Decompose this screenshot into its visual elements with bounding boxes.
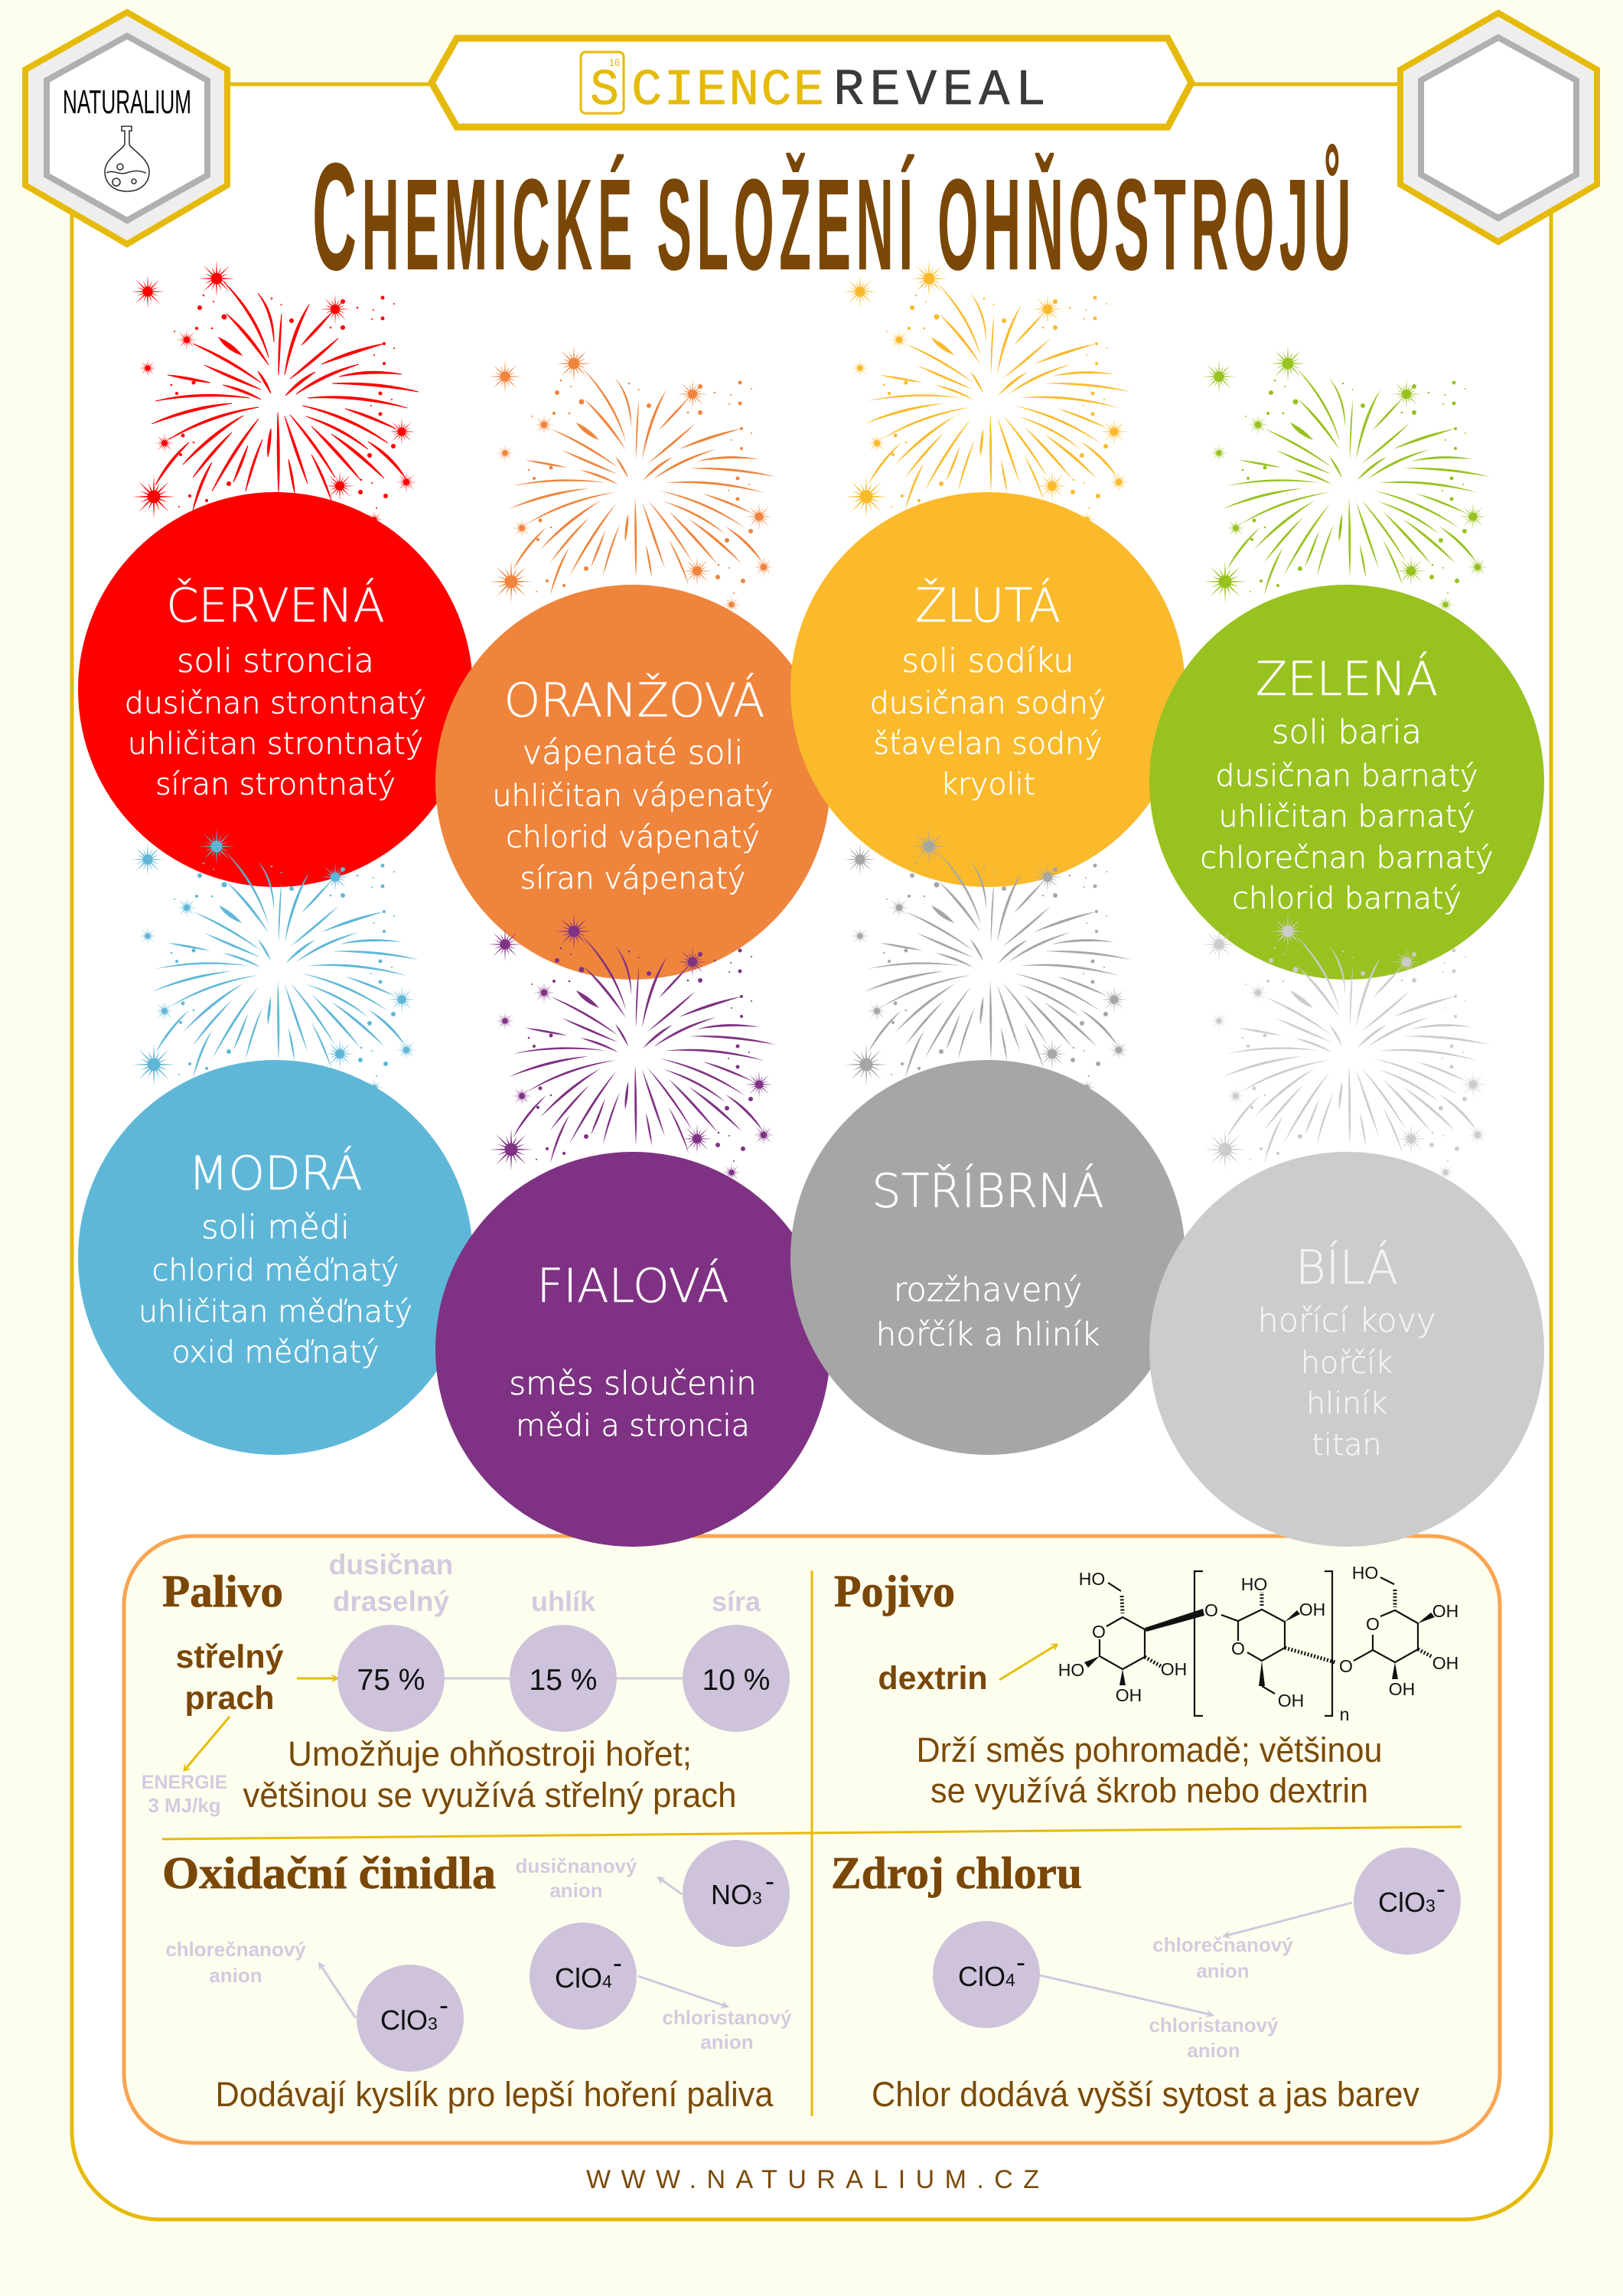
arrow: prach to energie	[184, 1717, 230, 1770]
circle: bílá: hořčík	[1301, 1345, 1393, 1381]
circle: modrá: oxid měďnatý	[172, 1335, 379, 1370]
bottom info panel	[124, 1536, 1500, 2143]
circle: žlutá: kryolit	[940, 767, 1035, 802]
circle: oranžová	[435, 585, 830, 980]
label: chlorečnanový anion: chlorečnanový	[165, 1938, 306, 1961]
label: chlorečnanový anion	[165, 1938, 306, 1987]
circle: oranžová: síran vápenatý	[520, 861, 745, 896]
circle: zelená: uhličitan barnatý	[1219, 799, 1475, 834]
ion: NO3: -	[765, 1865, 774, 1896]
section: Zdroj chloru	[831, 1848, 1461, 2114]
heading: Palivo: Palivo	[162, 1566, 283, 1616]
empty hexagon, top right	[1400, 13, 1597, 242]
component chain: 75 15 10 percent: uhlík	[531, 1586, 596, 1617]
circle: oranžová: chlorid vápenatý	[506, 820, 760, 855]
circle: červená	[78, 492, 473, 887]
circle: fialová: mědi a stroncia	[516, 1408, 750, 1443]
label: chlorečnanový anion	[1152, 1933, 1293, 1982]
label: dusičnanový anion: dusičnanový	[516, 1854, 637, 1877]
circle: žlutá: ŽLUTÁ	[915, 578, 1061, 633]
circle: bílá	[1149, 1152, 1544, 1547]
arrows: chlorine anion labels	[1040, 1903, 1352, 2015]
circle: zelená: chlorid barnatý	[1232, 881, 1462, 916]
circle: zelená: soli baria	[1272, 713, 1422, 752]
ion: ClO3	[357, 1965, 464, 2072]
circle: modrá	[78, 1060, 473, 1455]
circle: bílá: hliník	[1306, 1386, 1387, 1421]
label: chloristanový anion: chloristanový	[1149, 2014, 1279, 2037]
label: střelný prach	[175, 1639, 284, 1717]
chart: dextrin molecule: OH	[1432, 1601, 1458, 1621]
circle: stříbrná	[790, 1060, 1185, 1455]
component chain: 75 15 10 percent	[329, 1549, 790, 1732]
chart: dextrin molecule: OH	[1161, 1659, 1187, 1679]
circle: modrá: soli mědi	[201, 1208, 350, 1247]
description: Pojivo	[917, 1730, 1382, 1810]
circle: fialová: FIALOVÁ	[536, 1258, 729, 1313]
description: Pojivo: Drží směs pohromadě; většinou	[917, 1730, 1382, 1769]
label: energie	[142, 1772, 227, 1817]
component chain: 75 15 10 percent: 75 %	[357, 1664, 425, 1697]
circle: modrá: MODRÁ	[188, 1146, 363, 1201]
description: Oxidační činidla: Dodávají kyslík pro lepší hoření paliva	[216, 2075, 774, 2114]
chart: dextrin molecule: O	[1366, 1614, 1380, 1634]
circle: stříbrná: hořčík a hliník	[876, 1316, 1100, 1353]
label: chloristanový anion: anion	[1187, 2039, 1240, 2062]
description: Zdroj chloru: Chlor dodává vyšší sytost a jas barev	[872, 2075, 1419, 2114]
circle: stříbrná: STŘÍBRNÁ	[872, 1163, 1104, 1218]
description: Palivo: Umožňuje ohňostroji hořet;	[288, 1734, 692, 1773]
arrows: anion labels	[319, 1877, 728, 2018]
component chain: 75 15 10 percent: dusičnan	[329, 1549, 453, 1580]
circle: modrá: chlorid měďnatý	[152, 1253, 399, 1288]
component chain: 75 15 10 percent: 10 %	[702, 1664, 770, 1697]
label: dusičnanový anion: anion	[549, 1879, 603, 1902]
circle: žlutá: dusičnan sodný	[870, 686, 1106, 721]
circle: červená: soli stroncia	[177, 642, 374, 680]
chart: dextrin molecule: OH	[1116, 1685, 1142, 1705]
circle: oranžová: ORANŽOVÁ	[504, 673, 764, 728]
circle: zelená: chlorečnan barnatý	[1200, 840, 1494, 876]
ion: ClO3 right	[1354, 1848, 1461, 1955]
component chain: 75 15 10 percent: síra	[712, 1586, 761, 1617]
circle: červená: uhličitan strontnatý	[128, 726, 423, 762]
label: chloristanový anion	[1149, 2014, 1279, 2062]
heading: Zdroj chloru: Zdroj chloru	[831, 1848, 1082, 1898]
ion: ClO4 left: -	[1016, 1946, 1025, 1978]
chart: dextrin molecule: O	[1092, 1622, 1106, 1642]
chart: dextrin molecule: n	[1340, 1704, 1349, 1724]
section: Oxidační činidla	[162, 1840, 792, 2114]
chart: dextrin molecule: OH	[1389, 1679, 1415, 1699]
label: dusičnanový anion	[516, 1854, 637, 1902]
ion: NO3: NO3	[711, 1879, 762, 1910]
banner: Science Reveal: CIENCE	[631, 62, 824, 120]
logo hexagon: Naturalium: NATURALIUM	[63, 83, 191, 121]
banner: Science Reveal	[432, 38, 1191, 127]
arrow: prach to dusičnan	[297, 1678, 337, 1679]
heading: Pojivo: Pojivo	[834, 1566, 955, 1616]
component chain: 75 15 10 percent: 15 %	[530, 1664, 597, 1697]
label: energie: ENERGIE	[142, 1772, 227, 1793]
circle: žlutá: šťavelan sodný	[874, 726, 1102, 762]
circle: modrá: uhličitan měďnatý	[139, 1294, 412, 1329]
chart: dextrin molecule: O	[1339, 1656, 1353, 1676]
label: chlorečnanový anion: anion	[1196, 1959, 1250, 1982]
circle: zelená: dusičnan barnatý	[1215, 758, 1478, 794]
circle: fialová: směs sloučenin	[509, 1365, 757, 1402]
circle: žlutá: soli sodíku	[901, 642, 1074, 680]
section: Palivo	[142, 1549, 790, 1817]
ion: ClO3 right: ClO3	[1378, 1887, 1436, 1918]
label: chloristanový anion: chloristanový	[662, 2006, 792, 2029]
ion: ClO3 right: -	[1436, 1873, 1445, 1904]
fireworks: top row	[131, 260, 1490, 614]
fireworks: bottom row	[131, 828, 1490, 1182]
ion: ClO3: -	[439, 1989, 448, 2020]
section: Pojivo	[834, 1563, 1458, 1810]
chart: dextrin molecule: HO	[1241, 1574, 1267, 1594]
circle: červená: dusičnan strontnatý	[125, 686, 426, 721]
circle: bílá: BÍLÁ	[1295, 1240, 1398, 1295]
chart: dextrin molecule: OH	[1278, 1691, 1304, 1711]
circle: zelená: ZELENÁ	[1256, 651, 1438, 706]
heading: Oxidační činidla: Oxidační činidla	[162, 1848, 496, 1898]
ion: ClO4 left	[933, 1921, 1040, 2028]
circle: bílá: hořící kovy	[1257, 1302, 1436, 1340]
circle: červená: ČERVENÁ	[166, 578, 385, 633]
description: Palivo: většinou se využívá střelný prach	[243, 1776, 736, 1815]
ion: ClO4 left: ClO4	[958, 1961, 1015, 1992]
circle: zelená	[1149, 585, 1544, 980]
chart: dextrin molecule: O	[1231, 1639, 1245, 1658]
ion: ClO3: ClO3	[380, 2004, 438, 2036]
description: Pojivo: se využívá škrob nebo dextrin	[930, 1771, 1368, 1810]
label: chloristanový anion: anion	[700, 2030, 754, 2053]
chart: dextrin molecule: HO	[1352, 1563, 1378, 1583]
circle: červená: síran strontnatý	[155, 767, 396, 802]
label: střelný prach: střelný	[175, 1639, 284, 1675]
chart: dextrin molecule: HO	[1079, 1569, 1105, 1589]
label: chlorečnanový anion: chlorečnanový	[1152, 1933, 1293, 1956]
chart: dextrin molecule: HO	[1058, 1660, 1084, 1680]
circle: bílá: titan	[1312, 1427, 1382, 1463]
chart: dextrin molecule: O	[1204, 1600, 1218, 1620]
circle: žlutá	[790, 492, 1185, 887]
panel dividers	[162, 1570, 1462, 2116]
footer: website: WWW.NATURALIUM.CZ	[586, 2165, 1039, 2194]
circle: fialová	[435, 1152, 830, 1547]
logo hexagon: Naturalium	[25, 12, 227, 244]
ion: ClO4	[530, 1923, 637, 2030]
circle: oranžová: vápenaté soli	[523, 734, 743, 772]
label: dextrin: dextrin	[878, 1660, 988, 1697]
label: energie: 3 MJ/kg	[148, 1794, 221, 1817]
chart: dextrin molecule: OH	[1432, 1653, 1458, 1673]
label: střelný prach: prach	[184, 1680, 275, 1717]
banner: Science Reveal: REVEAL	[833, 62, 1046, 120]
description: Palivo	[243, 1734, 736, 1815]
label: chlorečnanový anion: anion	[209, 1964, 262, 1987]
label: chloristanový anion	[662, 2006, 792, 2053]
circle: stříbrná: rozžhavený	[894, 1271, 1082, 1309]
banner: Science Reveal: S	[590, 62, 619, 120]
chart: dextrin molecule: OH	[1299, 1600, 1325, 1619]
arrow: dextrin to molecule	[999, 1645, 1057, 1680]
ion: ClO4: ClO4	[555, 1962, 612, 1994]
banner: Science Reveal: 16	[609, 57, 620, 68]
icon: flask	[105, 126, 149, 191]
ion: ClO4: -	[613, 1947, 622, 1978]
ion: NO3	[683, 1840, 790, 1947]
component chain: 75 15 10 percent: draselný	[333, 1586, 450, 1617]
chart: dextrin molecule	[1058, 1563, 1458, 1724]
circle: oranžová: uhličitan vápenatý	[492, 778, 774, 814]
